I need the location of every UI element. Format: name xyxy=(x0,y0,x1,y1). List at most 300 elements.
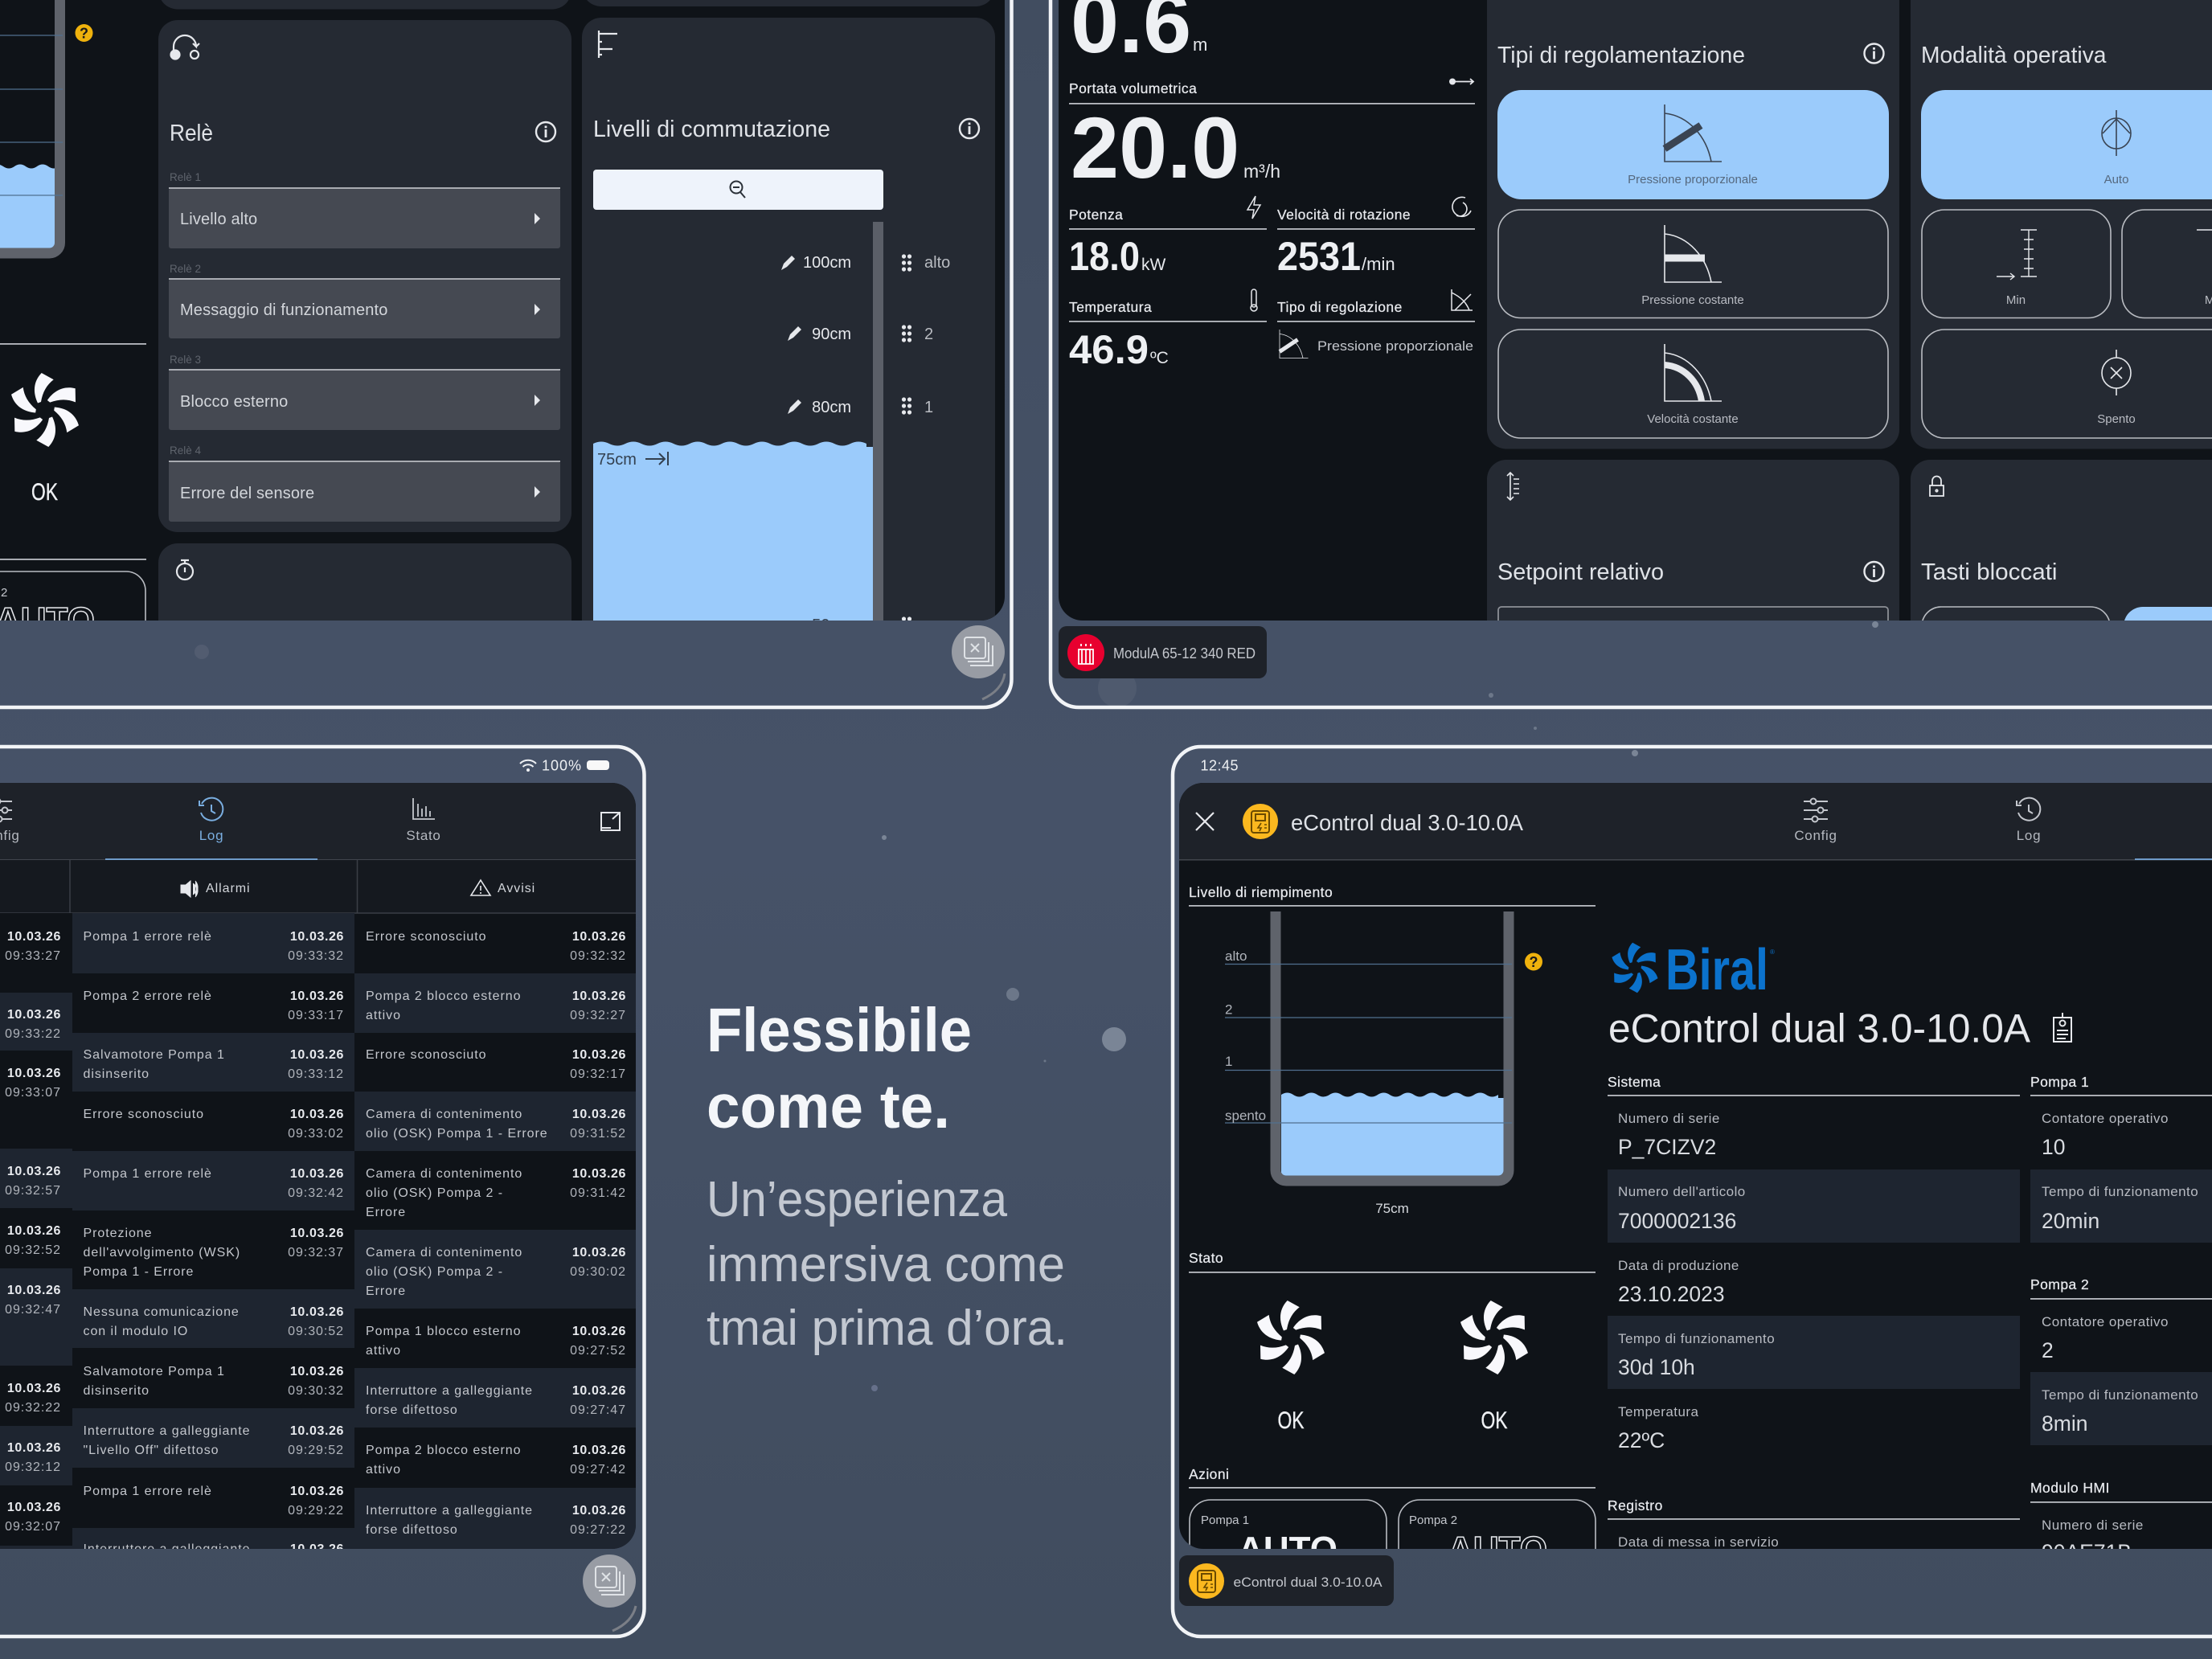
log column: warnings: 09:27:47 xyxy=(570,1403,626,1417)
relay 3: Blocco esterno xyxy=(180,393,288,411)
tank xyxy=(1225,911,1512,1181)
serial number: Numero di serie xyxy=(1618,1111,1720,1126)
status bar: 100% xyxy=(542,757,582,773)
section: pump 1: Pompa 1 xyxy=(2030,1074,2089,1090)
section: system xyxy=(1608,1074,2020,1452)
card: relative setpoint xyxy=(1487,460,1899,669)
log column: warnings: Camera di contenimento xyxy=(366,1167,522,1181)
card: locked keys xyxy=(1911,460,2212,669)
log column: alarms: Interruttore a galleggiante xyxy=(84,1424,251,1438)
icon: info xyxy=(536,122,555,141)
status OK: OK xyxy=(31,479,58,506)
log column: warnings: forse difettoso xyxy=(366,1523,458,1537)
card: control types xyxy=(1487,0,1899,449)
card: timer xyxy=(158,543,571,621)
icon: question mark xyxy=(1525,953,1542,971)
log column: warnings: 10.03.26 xyxy=(572,1167,626,1181)
log column: warnings: 10.03.26 xyxy=(572,930,626,944)
logo: Biral xyxy=(1609,938,1775,1002)
clock: 12:45 xyxy=(1201,757,1239,773)
log column: alarms: dell'avvolgimento (WSK) xyxy=(84,1246,240,1260)
tab: log xyxy=(105,798,317,860)
app content clipped xyxy=(1059,0,2212,669)
log column: warnings: olio (OSK) Pompa 2 - xyxy=(366,1186,503,1200)
pump 2 button: 2 xyxy=(1,586,7,600)
tank partial xyxy=(0,0,63,253)
log column: warnings xyxy=(354,930,636,1549)
serial number xyxy=(1618,1111,1720,1159)
section: pump 1 xyxy=(2030,1074,2212,1243)
background dots xyxy=(195,621,1878,1391)
option outline xyxy=(1922,607,2110,663)
log column: left: 10.03.26 xyxy=(7,1067,61,1080)
title line 2: come te. xyxy=(707,1072,950,1141)
card: operating mode xyxy=(1911,0,2212,449)
device tag xyxy=(1059,626,1267,678)
log column: warnings: Pompa 1 blocco esterno xyxy=(366,1325,521,1338)
log column: alarms: 10.03.26 xyxy=(290,1108,344,1121)
log column: warnings: 10.03.26 xyxy=(572,989,626,1003)
device tag xyxy=(1179,1555,1394,1606)
tab: log: Log xyxy=(2017,828,2041,843)
log column: alarms: disinserito xyxy=(84,1384,150,1398)
log column: warnings: Errore sconosciuto xyxy=(366,1048,487,1062)
section: HMI module xyxy=(2030,1480,2212,1564)
log column: warnings: attivo xyxy=(366,1344,401,1358)
log column: left: 09:32:07 xyxy=(5,1520,61,1534)
option: constant pressure: Pressione costante xyxy=(1641,293,1744,307)
icon: levels xyxy=(599,31,617,58)
device frame xyxy=(1173,747,2212,1636)
card: switching levels xyxy=(582,18,995,661)
option: constant pressure xyxy=(1498,210,1888,318)
log column: alarms: 10.03.26 xyxy=(290,1227,344,1240)
icon: setpoint xyxy=(1507,473,1519,500)
header: alarms: Allarmi xyxy=(206,882,251,895)
log column: warnings: 10.03.26 xyxy=(572,1246,626,1260)
option: proportional pressure xyxy=(1497,90,1889,199)
log column: alarms: Interruttore a galleggiante xyxy=(84,1542,251,1556)
relay 2: Relè 2 xyxy=(170,263,201,275)
temperature: 22ºC xyxy=(1618,1428,1665,1452)
log column: left: 10.03.26 xyxy=(7,930,61,944)
icon: fan 2 xyxy=(1457,1301,1531,1374)
log column: alarms: 09:29:22 xyxy=(288,1504,344,1518)
option: min: Min xyxy=(2006,293,2026,307)
log column: alarms: 10.03.26 xyxy=(290,1167,344,1181)
tab: config xyxy=(1794,799,1837,843)
log column: alarms: 09:33:17 xyxy=(288,1009,344,1022)
metric: rotation speed xyxy=(1277,197,1475,279)
section: actions: Azioni xyxy=(1189,1466,1229,1482)
log column: warnings: Errore xyxy=(366,1284,406,1298)
app background xyxy=(1179,783,2212,1549)
corner mark xyxy=(612,1606,636,1631)
metric: flow: m³/h xyxy=(1243,161,1280,182)
log column: warnings: 10.03.26 xyxy=(572,1048,626,1062)
current level xyxy=(598,452,669,465)
status divider xyxy=(0,343,146,345)
metric: temperature: ºC xyxy=(1150,349,1169,367)
log column: alarms: Pompa 1 errore relè xyxy=(84,930,212,944)
relay 2 xyxy=(169,263,560,338)
log column: alarms: Salvamotore Pompa 1 xyxy=(84,1048,225,1062)
log column: alarms: 10.03.26 xyxy=(290,1305,344,1319)
log column: alarms: Salvamotore Pompa 1 xyxy=(84,1365,225,1378)
metric: flow xyxy=(1069,79,1475,196)
metric: regulation type: Pressione proporzionale xyxy=(1317,338,1473,354)
log column: left: 09:32:22 xyxy=(5,1401,61,1415)
button: pump 1: Pompa 1 xyxy=(1201,1514,1249,1527)
button: pump 1 xyxy=(1190,1500,1387,1588)
heading: Setpoint relativo xyxy=(1497,559,1664,585)
runtime: 30d 10h xyxy=(1618,1355,1695,1379)
icon: info xyxy=(1865,562,1884,581)
section: pump 2 xyxy=(2030,1276,2212,1445)
metric: rotation speed: Velocità di rotazione xyxy=(1277,207,1411,223)
input field xyxy=(1498,607,1888,663)
production date xyxy=(1618,1258,1739,1306)
log column: alarms: Pompa 2 errore relè xyxy=(84,989,212,1003)
icon: question mark: ? xyxy=(1529,954,1538,970)
log column: alarms: 09:30:32 xyxy=(288,1384,344,1398)
section: pump 2: Tempo di funzionamento xyxy=(2042,1387,2198,1403)
log column: left: 09:32:52 xyxy=(5,1243,61,1257)
level 90cm: 90cm xyxy=(812,326,851,343)
section: pump 1: 20min xyxy=(2042,1209,2099,1233)
log column: alarms: 09:33:32 xyxy=(288,949,344,963)
device frame xyxy=(0,747,645,1636)
log column: warnings: attivo xyxy=(366,1463,401,1477)
metric: height xyxy=(1074,0,1206,53)
log column: warnings: Interruttore a galleggiante xyxy=(366,1504,533,1518)
metric: rotation speed: /min xyxy=(1362,254,1395,274)
option: min xyxy=(1922,210,2111,318)
log column: left: 10.03.26 xyxy=(7,1382,61,1395)
log column: warnings: 09:32:17 xyxy=(570,1067,626,1081)
status bar xyxy=(520,757,609,773)
icon: warning xyxy=(471,880,490,895)
relay 4: Errore del sensore xyxy=(180,485,314,502)
relay 3: Relè 3 xyxy=(170,354,201,366)
level 100cm: alto xyxy=(924,254,950,272)
tab: status xyxy=(406,798,441,843)
log column: alarms: 09:32:42 xyxy=(288,1186,344,1200)
metric: power xyxy=(1069,196,1267,279)
log column: warnings: Errore sconosciuto xyxy=(366,930,487,944)
logo: Biral: Biral xyxy=(1665,938,1768,1002)
section: pump 2: 2 xyxy=(2042,1338,2054,1362)
level labels: spento xyxy=(1225,1108,1266,1124)
section: log register: Data di messa in servizio xyxy=(1618,1534,1779,1550)
heading: Tasti bloccati xyxy=(1921,559,2058,585)
option: off: Spento xyxy=(2097,412,2136,426)
level value: 75cm xyxy=(1375,1201,1409,1216)
log column: left: 09:33:27 xyxy=(5,949,61,963)
log column: alarms: 09:33:02 xyxy=(288,1127,344,1141)
icon: info xyxy=(1865,43,1884,63)
log column: warnings: 09:31:42 xyxy=(570,1186,626,1200)
section: pump 2: 8min xyxy=(2042,1411,2087,1436)
runtime: Tempo di funzionamento xyxy=(1618,1331,1775,1346)
article number: 7000002136 xyxy=(1618,1209,1736,1233)
current level: 75cm xyxy=(597,451,637,469)
log column: alarms: 10.03.26 xyxy=(290,1365,344,1378)
corner mark xyxy=(982,674,1005,699)
log column: alarms: Nessuna comunicazione xyxy=(84,1305,240,1319)
log column: warnings: 09:32:27 xyxy=(570,1009,626,1022)
log column: alarms: 10.03.26 xyxy=(290,1485,344,1498)
table headers xyxy=(0,860,636,913)
tab: log: Log xyxy=(199,828,223,843)
log column: alarms: 09:30:52 xyxy=(288,1325,344,1338)
log column: alarms: 10.03.26 xyxy=(290,1048,344,1062)
log column: warnings: 09:27:22 xyxy=(570,1523,626,1537)
relay 4: Relè 4 xyxy=(170,444,202,457)
log column: warnings: Camera di contenimento xyxy=(366,1108,522,1121)
option: constant speed: Velocità costante xyxy=(1647,412,1739,426)
section: HMI module: Modulo HMI xyxy=(2030,1480,2110,1496)
log column: alarms xyxy=(72,913,354,1556)
option selected xyxy=(2124,607,2212,663)
section: status xyxy=(1189,1250,1596,1434)
section: fill level: Livello di riempimento xyxy=(1189,884,1333,900)
log column: alarms: Pompa 1 errore relè xyxy=(84,1167,212,1181)
log column: warnings: attivo xyxy=(366,1009,401,1022)
section: pump 2: Pompa 2 xyxy=(2030,1276,2089,1292)
section: HMI module: 90AE71B xyxy=(2042,1540,2132,1564)
metric: power: kW xyxy=(1141,256,1165,274)
serial number: P_7CIZV2 xyxy=(1618,1135,1716,1159)
heading: Modalità operativa xyxy=(1921,43,2107,68)
app background xyxy=(0,783,636,1549)
log column: alarms: Protezione xyxy=(84,1227,153,1240)
relay 2: Messaggio di funzionamento xyxy=(180,301,387,319)
title: Flessibile xyxy=(707,996,972,1065)
status 2: OK xyxy=(1481,1407,1508,1434)
option: off xyxy=(1922,330,2212,438)
icon: lock xyxy=(1930,477,1944,496)
log column: left: 10.03.26 xyxy=(7,1008,61,1022)
actions divider xyxy=(0,559,146,560)
slider track xyxy=(873,222,883,656)
button: pump 2: Pompa 2 xyxy=(1409,1514,1457,1527)
card: relays xyxy=(158,20,571,532)
section: pump 1: Tempo di funzionamento xyxy=(2042,1184,2198,1199)
level 50cm clipped xyxy=(813,616,911,621)
metric: temperature: Temperatura xyxy=(1069,299,1152,315)
log column: alarms: 09:32:37 xyxy=(288,1246,344,1260)
icon: info xyxy=(960,119,979,138)
tab: config: Config xyxy=(1794,828,1837,843)
log column: alarms: 10.03.26 xyxy=(290,989,344,1003)
card: top right stub xyxy=(582,0,995,6)
log column: warnings: olio (OSK) Pompa 2 - xyxy=(366,1265,503,1279)
log column: warnings: Interruttore a galleggiante xyxy=(366,1384,533,1398)
log column: warnings: 09:30:02 xyxy=(570,1265,626,1279)
subtitle: tmai prima d’ora. xyxy=(707,1301,1067,1356)
icon: tag xyxy=(2054,1013,2071,1042)
subtitle xyxy=(707,1172,1067,1356)
tab: status: Stato xyxy=(406,828,441,843)
relay 3 xyxy=(169,354,560,430)
button: pump 1: AUTO xyxy=(1238,1530,1337,1569)
panel: tablet frame bottom left xyxy=(0,747,645,1636)
section: system: Sistema xyxy=(1608,1074,1661,1090)
icon: controller badge xyxy=(1189,1563,1224,1599)
level 80cm: 80cm xyxy=(812,399,851,416)
button: pump 2 xyxy=(1399,1500,1596,1588)
section: pump 1: 10 xyxy=(2042,1135,2065,1159)
log column: warnings: 09:31:52 xyxy=(570,1127,626,1141)
device heading: eControl dual 3.0-10.0A xyxy=(1608,1006,2031,1051)
log column: alarms: disinserito xyxy=(84,1067,150,1081)
runtime xyxy=(1608,1316,2020,1389)
panel: tablet frame top left xyxy=(0,0,1013,707)
option: max xyxy=(2122,210,2212,318)
log column: warnings: 09:27:52 xyxy=(570,1344,626,1358)
log column: warnings: 10.03.26 xyxy=(572,1504,626,1518)
log column: alarms: 10.03.26 xyxy=(290,1542,344,1556)
production date: 23.10.2023 xyxy=(1618,1282,1725,1306)
production date: Data di produzione xyxy=(1618,1258,1739,1273)
log column: left: 10.03.26 xyxy=(7,1165,61,1178)
metric: flow: 20.0 xyxy=(1071,99,1239,196)
log column: warnings: 10.03.26 xyxy=(572,1384,626,1398)
status 1: OK xyxy=(1278,1407,1304,1434)
metric: power: 18.0 xyxy=(1069,234,1140,279)
tab bar xyxy=(0,783,636,860)
log column: alarms: 09:33:12 xyxy=(288,1067,344,1081)
icon: question mark xyxy=(76,24,93,42)
log column: warnings: olio (OSK) Pompa 1 - Errore xyxy=(366,1127,548,1141)
level 50cm clipped: 50cm xyxy=(812,616,851,634)
metric: temperature xyxy=(1069,289,1267,372)
temperature xyxy=(1618,1404,1698,1452)
option: auto: Auto xyxy=(2104,173,2128,186)
article number: Numero dell'articolo xyxy=(1618,1184,1746,1199)
relay 4 xyxy=(169,444,560,522)
section: pump 2: Contatore operativo xyxy=(2042,1314,2169,1329)
header bar xyxy=(1179,783,2212,860)
section: HMI module: Numero di serie xyxy=(2042,1518,2144,1533)
section: log register: Registro xyxy=(1608,1497,1663,1514)
app content clipped xyxy=(1179,783,2212,1588)
app content clipped xyxy=(0,0,1013,661)
level labels: alto xyxy=(1225,948,1247,964)
option: constant speed xyxy=(1498,330,1888,438)
log column: warnings: 09:27:42 xyxy=(570,1463,626,1477)
metric: height: m xyxy=(1193,35,1207,55)
icon: close xyxy=(1196,813,1214,830)
level 100cm: 100cm xyxy=(803,254,851,272)
log column: left xyxy=(0,913,72,1552)
log column: alarms: Pompa 1 - Errore xyxy=(84,1265,194,1279)
log column: left: 10.03.26 xyxy=(7,1441,61,1455)
active tab underline xyxy=(2135,858,2212,860)
log column: left: 09:33:22 xyxy=(5,1027,61,1041)
article number xyxy=(1608,1169,2020,1243)
app background xyxy=(1059,0,2212,627)
log column: left: 10.03.26 xyxy=(7,1284,61,1297)
pump 2 button xyxy=(0,571,146,621)
level labels xyxy=(1225,948,1266,1124)
metric: flow: Portata volumetrica xyxy=(1069,80,1197,96)
section: actions xyxy=(1189,1466,1596,1588)
device frame xyxy=(0,0,1011,707)
card: top left stub xyxy=(158,0,571,10)
option: proportional pressure: Pressione proporzionale xyxy=(1628,173,1758,186)
metric: regulation type: Tipo di regolazione xyxy=(1277,299,1403,315)
device tag: eControl dual 3.0-10.0A xyxy=(1233,1575,1382,1590)
log column: alarms: Pompa 1 errore relè xyxy=(84,1485,212,1498)
level 80cm: 1 xyxy=(924,399,933,416)
heading: Tipi di regolamentazione xyxy=(1497,43,1745,68)
section: pump 1: Contatore operativo xyxy=(2042,1111,2169,1126)
log column: alarms: 10.03.26 xyxy=(290,930,344,944)
section: status: Stato xyxy=(1189,1250,1223,1266)
logo: Biral: ® xyxy=(1770,948,1775,956)
subtitle: Un’esperienza xyxy=(707,1172,1007,1227)
relay 1: Relè 1 xyxy=(170,171,201,183)
tab: log xyxy=(2017,798,2041,843)
section: fill level xyxy=(1189,884,1596,1216)
level 100cm xyxy=(781,254,950,272)
option: auto xyxy=(1921,90,2212,199)
icon: controller badge xyxy=(1243,804,1278,839)
icon: fan 1 xyxy=(1254,1301,1328,1374)
device frame xyxy=(1051,0,2212,707)
log column: warnings: Camera di contenimento xyxy=(366,1246,522,1260)
heading: levels: Livelli di commutazione xyxy=(593,117,830,142)
device title: eControl dual 3.0-10.0A xyxy=(1291,810,1523,835)
relay 1: Livello alto xyxy=(180,211,257,228)
app content clipped xyxy=(0,783,636,1556)
zoom button xyxy=(593,170,883,210)
water level xyxy=(593,442,873,621)
log column: warnings: 09:32:32 xyxy=(570,949,626,963)
metric: power: Potenza xyxy=(1069,207,1123,223)
log column: warnings: 10.03.26 xyxy=(572,1108,626,1121)
log column: left: 09:33:07 xyxy=(5,1086,61,1100)
icon: expand xyxy=(601,813,620,830)
level labels: 2 xyxy=(1225,1002,1232,1018)
log column: warnings: 10.03.26 xyxy=(572,1325,626,1338)
metric: temperature: 46.9 xyxy=(1069,327,1149,372)
log column: warnings: Errore xyxy=(366,1206,406,1219)
level labels: 1 xyxy=(1225,1054,1232,1069)
relay 1 xyxy=(169,171,560,248)
level 80cm xyxy=(788,397,933,416)
heading block: centre xyxy=(707,996,1067,1356)
metric: rotation speed: 2531 xyxy=(1277,234,1361,279)
panel: tablet frame top right xyxy=(1051,0,2212,707)
log column: warnings: Pompa 2 blocco esterno xyxy=(366,1444,521,1457)
log column: left: 09:32:12 xyxy=(5,1460,61,1474)
icon: question mark: ? xyxy=(80,26,88,42)
export button xyxy=(952,625,1005,678)
tab: config clipped xyxy=(0,799,19,843)
log column: alarms: "Livello Off" difettoso xyxy=(84,1444,219,1457)
log column: left: 10.03.26 xyxy=(7,1224,61,1238)
device tag: ModulA 65-12 340 RED xyxy=(1113,645,1256,662)
level 90cm: 2 xyxy=(924,326,933,343)
temperature: Temperatura xyxy=(1618,1404,1698,1419)
log column: left: 09:32:57 xyxy=(5,1184,61,1198)
log column: warnings: Pompa 2 blocco esterno xyxy=(366,989,521,1003)
icon: relay xyxy=(170,35,199,59)
log column: alarms: 10.03.26 xyxy=(290,1424,344,1438)
